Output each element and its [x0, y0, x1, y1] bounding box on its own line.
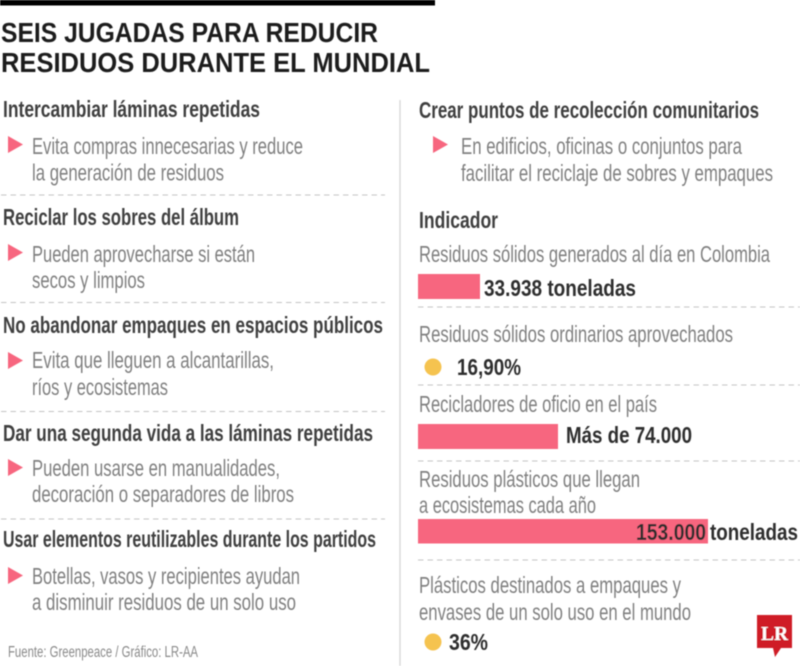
- tip 5: elementos reutilizables: Usar elementos reutilizables durante los partidos: [3, 526, 376, 552]
- tip 5: elementos reutilizables: Botellas, vasos y recipientes ayudan: [32, 563, 300, 589]
- top black bar: [0, 0, 435, 6]
- indicator: plásticos de un solo uso: [419, 572, 691, 655]
- title: SEIS JUGADAS PARA REDUCIR: [1, 17, 378, 48]
- tip 2: reciclar sobres: Reciclar los sobres del álbum: [3, 204, 239, 230]
- logo: LR: LR: [761, 623, 789, 645]
- indicator: plásticos a ecosistemas: Residuos plásticos que llegan: [419, 466, 640, 492]
- tip 3: no abandonar empaques: [3, 312, 383, 400]
- indicator heading: Indicador: [419, 207, 498, 233]
- title: [1, 17, 430, 78]
- indicator: plásticos a ecosistemas: [418, 466, 798, 545]
- tip 6: puntos de recolección: [419, 97, 773, 186]
- tip 5: elementos reutilizables: [3, 526, 376, 615]
- indicator: recicladores de oficio: Recicladores de oficio en el país: [419, 391, 657, 417]
- indicator: plásticos a ecosistemas: 153.000: [636, 519, 706, 545]
- tip 1: intercambiar láminas: la generación de residuos: [32, 160, 224, 186]
- indicator: recicladores de oficio: Más de 74.000: [566, 422, 692, 448]
- indicator: ordinarios aprovechados: [419, 321, 733, 380]
- indicator: residuos sólidos al día: 33.938 toneladas: [484, 275, 636, 301]
- tip 1: intercambiar láminas: [3, 96, 303, 186]
- tip 4: segunda vida: [3, 420, 373, 507]
- tip 3: no abandonar empaques: ríos y ecosistemas: [32, 374, 168, 400]
- tip 2: reciclar sobres: Pueden aprovecharse si están: [32, 241, 255, 267]
- tip 1: intercambiar láminas: Intercambiar láminas repetidas: [3, 96, 260, 122]
- tip 2: reciclar sobres: secos y limpios: [32, 267, 145, 293]
- tip 4: segunda vida: Pueden usarse en manualidades,: [32, 455, 280, 481]
- indicator: plásticos de un solo uso: 36%: [449, 629, 488, 655]
- indicator: residuos sólidos al día: [418, 241, 770, 301]
- indicator: plásticos de un solo uso: Plásticos destinados a empaques y: [419, 572, 681, 598]
- tip 4: segunda vida: decoración o separadores de libros: [32, 481, 294, 507]
- title: RESIDUOS DURANTE EL MUNDIAL: [1, 47, 430, 78]
- indicator: recicladores de oficio: [418, 391, 692, 449]
- indicator: plásticos a ecosistemas: a ecosistemas cada año: [419, 492, 596, 518]
- logo: LR: [757, 615, 792, 657]
- tip 4: segunda vida: Dar una segunda vida a las láminas repetidas: [3, 420, 373, 446]
- tip 2: reciclar sobres: [3, 204, 255, 293]
- indicator: plásticos de un solo uso: envases de un solo uso en el mundo: [419, 599, 691, 625]
- tip 1: intercambiar láminas: Evita compras innecesarias y reduce: [32, 133, 303, 159]
- tip 3: no abandonar empaques: Evita que lleguen a alcantarillas,: [32, 347, 274, 373]
- tip 3: no abandonar empaques: No abandonar empaques en espacios públicos: [3, 312, 383, 338]
- indicator: ordinarios aprovechados: 16,90%: [457, 354, 521, 380]
- source: Fuente: Greenpeace / Gráfico: LR-AA: [8, 644, 198, 661]
- tip 5: elementos reutilizables: a disminuir residuos de un solo uso: [32, 589, 296, 615]
